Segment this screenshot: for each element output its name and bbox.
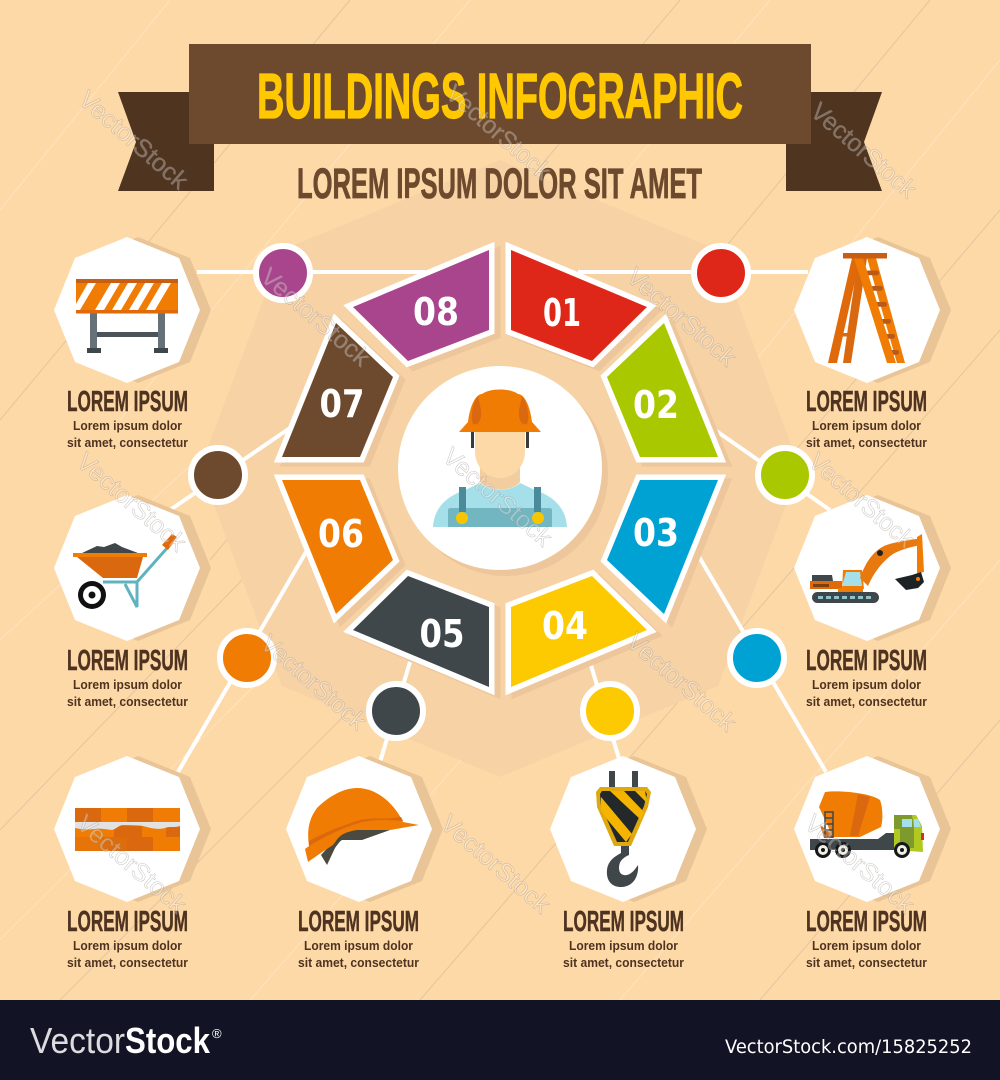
watermarks: VectorStock xyxy=(71,447,192,557)
logo xyxy=(30,1020,222,1061)
segment 04 xyxy=(511,576,647,687)
segment 07 xyxy=(282,323,393,457)
heading: LOREM IPSUM xyxy=(67,645,188,677)
segment 01: 01 xyxy=(543,291,581,335)
ribbon right tail xyxy=(786,92,882,191)
body text xyxy=(806,677,927,709)
logo: Stock xyxy=(125,1020,211,1061)
segment 02 xyxy=(607,323,718,457)
panel: cement mixer xyxy=(794,756,951,970)
segment 04: 04 xyxy=(542,604,588,648)
body text: Lorem ipsum dolor xyxy=(812,938,921,953)
ribbon left tail xyxy=(118,92,214,191)
logo: Vector xyxy=(30,1020,125,1061)
icon: excavator xyxy=(810,534,924,603)
body text: sit amet, consectetur xyxy=(806,435,927,450)
icon: worker xyxy=(433,390,567,527)
icon: road barrier xyxy=(76,279,178,353)
body text: Lorem ipsum dolor xyxy=(73,418,182,433)
segment 06: 06 xyxy=(318,512,364,556)
body text xyxy=(563,938,684,970)
body text: sit amet, consectetur xyxy=(67,694,188,709)
worker badge xyxy=(398,366,608,576)
segment 08: 08 xyxy=(413,290,459,334)
body text xyxy=(806,938,927,970)
title ribbon xyxy=(118,44,882,191)
panel: wheelbarrow xyxy=(54,495,211,709)
segment 07: 07 xyxy=(320,382,364,426)
body text: sit amet, consectetur xyxy=(806,694,927,709)
segment 05: 05 xyxy=(420,612,464,656)
watermarks: VectorStock xyxy=(437,442,558,552)
connector lines xyxy=(170,272,830,772)
body text: Lorem ipsum dolor xyxy=(304,938,413,953)
icon: cement mixer xyxy=(810,791,924,858)
watermarks: VectorStock xyxy=(435,809,556,919)
icon: ladder xyxy=(828,253,905,363)
watermarks: VectorStock xyxy=(440,79,557,186)
watermarks: VectorStock xyxy=(799,809,920,919)
body text xyxy=(67,418,188,450)
footer bar xyxy=(0,1000,1000,1080)
watermarks: VectorStock xyxy=(255,629,372,736)
body text: sit amet, consectetur xyxy=(67,435,188,450)
icon: bricks xyxy=(75,808,180,851)
panel: crane hook xyxy=(550,756,707,970)
watermarks: VectorStock xyxy=(71,809,192,919)
central wheel xyxy=(282,250,724,691)
segment 05 xyxy=(353,576,489,687)
body text: sit amet, consectetur xyxy=(298,955,419,970)
segment 02: 02 xyxy=(633,383,679,427)
watermarks: VectorStock xyxy=(73,85,194,195)
panel: ladder xyxy=(794,237,951,450)
body text: sit amet, consectetur xyxy=(563,955,684,970)
body text xyxy=(67,677,188,709)
watermarks: VectorStock xyxy=(805,97,922,204)
heading: LOREM IPSUM xyxy=(563,906,684,938)
segment 08 xyxy=(353,250,489,361)
panel: road barrier xyxy=(54,237,211,450)
panel: bricks xyxy=(54,756,211,970)
segment 03 xyxy=(607,480,718,614)
watermarks: VectorStock xyxy=(621,627,742,737)
watermarks xyxy=(71,79,922,919)
connector dots xyxy=(191,246,812,738)
watermarks: VectorStock xyxy=(255,262,376,372)
watermarks: VectorStock xyxy=(803,447,920,554)
body text xyxy=(67,938,188,970)
watermarks: VectorStock xyxy=(621,262,742,372)
body text: Lorem ipsum dolor xyxy=(812,677,921,692)
subtitle: LOREM IPSUM DOLOR SIT AMET xyxy=(297,160,702,208)
segment 03: 03 xyxy=(633,511,679,555)
icon: hard hat xyxy=(305,788,419,865)
panel: excavator xyxy=(794,495,951,709)
body text: Lorem ipsum dolor xyxy=(569,938,678,953)
body text: Lorem ipsum dolor xyxy=(812,418,921,433)
background octagon xyxy=(200,160,800,777)
body text: Lorem ipsum dolor xyxy=(73,677,182,692)
image id: VectorStock.com/15825252 xyxy=(725,1036,972,1058)
icon: crane hook xyxy=(596,771,651,887)
body text xyxy=(298,938,419,970)
body text: sit amet, consectetur xyxy=(67,955,188,970)
segment 01 xyxy=(511,250,647,361)
panel: hard hat xyxy=(286,756,443,970)
heading: LOREM IPSUM xyxy=(67,906,188,938)
body text: Lorem ipsum dolor xyxy=(73,938,182,953)
ribbon band xyxy=(189,44,811,144)
wheel shadows xyxy=(288,254,724,691)
segment 06 xyxy=(282,480,393,614)
heading: LOREM IPSUM xyxy=(298,906,419,938)
icon: wheelbarrow xyxy=(73,534,177,609)
body text xyxy=(806,418,927,450)
logo: ® xyxy=(212,1026,222,1041)
heading: LOREM IPSUM xyxy=(67,386,188,418)
body text: sit amet, consectetur xyxy=(806,955,927,970)
